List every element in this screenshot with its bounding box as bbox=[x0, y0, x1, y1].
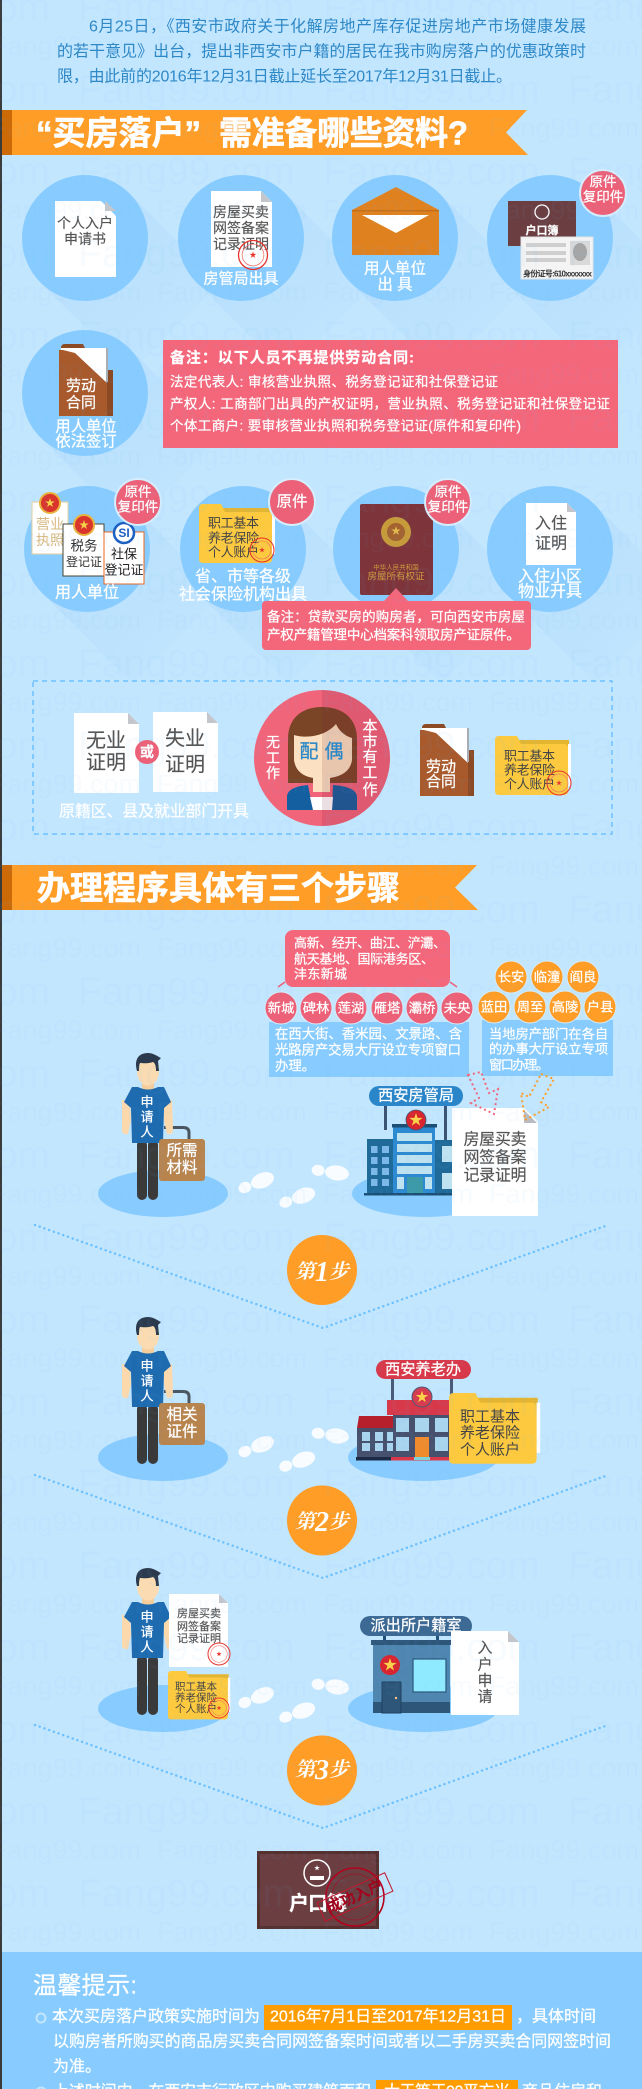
step 3: applicant with documents: 房屋买卖 bbox=[177, 1607, 221, 1620]
heading banner: three steps: 办理程序具体有三个步骤 bbox=[37, 870, 400, 906]
spouse portrait: 有 bbox=[362, 748, 378, 766]
issuer label: 原籍区、县及就业部门开具 bbox=[59, 802, 249, 820]
district bubbles: urban: 碑林 bbox=[303, 1000, 329, 1016]
material: pension account: 个人账户 bbox=[208, 544, 259, 560]
step 3: police station: 派出所户籍室 bbox=[370, 1618, 462, 1634]
material: business licences bbox=[24, 486, 150, 612]
labour contract folder: 合同 bbox=[426, 774, 456, 790]
spouse portrait: 偶 bbox=[324, 740, 344, 762]
material: pension account: 职工基本 bbox=[208, 516, 259, 530]
material: business licences: 执照 bbox=[36, 532, 64, 548]
jobless certificate: 证明 bbox=[165, 753, 205, 776]
step 3: applicant with documents: 网签备案 bbox=[177, 1619, 221, 1633]
step 1: housing bureau: 网签备案 bbox=[464, 1148, 526, 1166]
step 1 divider bbox=[35, 1225, 608, 1328]
jobless certificate bbox=[153, 712, 218, 792]
material: business licences: SI bbox=[118, 526, 130, 540]
step 3: applicant with documents: 个人账户 bbox=[175, 1702, 217, 1715]
step 2 divider bbox=[35, 1475, 608, 1578]
step 1: applicant with materials: 申 bbox=[140, 1094, 154, 1110]
step 1: housing bureau bbox=[352, 1086, 538, 1217]
tip 1: 本次买房落户政策实施时间为 bbox=[52, 2008, 260, 2026]
step 1: applicant with materials bbox=[98, 1053, 228, 1217]
step 3: applicant with documents: 养老保险 bbox=[175, 1691, 218, 1704]
labour contract folder: 劳动 bbox=[426, 758, 456, 776]
material: labour contract bbox=[22, 330, 148, 456]
material: contract filing record: 记录证明 bbox=[213, 236, 269, 252]
spouse portrait: 配 bbox=[299, 742, 319, 762]
material: business licences: 社保 bbox=[111, 546, 137, 562]
material: household register and ID: 身份证号:610xxxxxxx bbox=[523, 268, 593, 278]
step 2 badge: 第2步 bbox=[295, 1506, 351, 1538]
spouse portrait: 本 bbox=[362, 718, 378, 736]
step 2: applicant with certificates: 申 bbox=[140, 1358, 154, 1374]
tip 1: ，具体时间 bbox=[516, 2008, 596, 2026]
material: personal application bbox=[22, 175, 148, 301]
household register with stamp: 户口簿 bbox=[289, 1891, 347, 1915]
material: envelope: 出 具 bbox=[377, 276, 413, 294]
panel: tips bbox=[2, 1952, 642, 2089]
intro paragraph: 6月25日，《西安市政府关于化解房地产库存促进房地产市场健康发展 bbox=[89, 18, 586, 36]
or badge bbox=[135, 740, 159, 764]
step 1 badge bbox=[287, 1235, 357, 1305]
step 2: pension office: 养老保险 bbox=[460, 1424, 520, 1442]
material: contract filing record: 网签备案 bbox=[213, 220, 269, 236]
arrow: county route bbox=[521, 1074, 554, 1120]
heading banner: materials: 需准备哪些资料? bbox=[219, 114, 468, 152]
district bubbles: urban bbox=[265, 992, 473, 1024]
tip 1: 为准。 bbox=[53, 2058, 101, 2076]
step 2: applicant with certificates: 相关 bbox=[166, 1406, 198, 1424]
material: pension account: 社会保险机构出具 bbox=[179, 586, 307, 604]
blue box: urban window locations: 在西大街、香米园、文景路、含 bbox=[275, 1026, 462, 1042]
step 2: applicant with certificates: 证件 bbox=[166, 1422, 198, 1440]
step 3: applicant with documents: 职工基本 bbox=[175, 1680, 218, 1693]
unemployment certificate bbox=[74, 713, 139, 793]
footprints 1 bbox=[236, 1162, 350, 1211]
blue box: urban window locations bbox=[269, 1022, 469, 1077]
pension folder bbox=[495, 736, 571, 795]
blue box: county window locations: 当地房产部门在各自 bbox=[489, 1026, 608, 1042]
household register with stamp bbox=[257, 1851, 393, 1929]
jobless certificate: 失业 bbox=[165, 727, 205, 750]
material: labour contract: 合同 bbox=[66, 394, 96, 412]
material: property ownership certificate: 中华人民共和国 bbox=[373, 562, 419, 572]
step 1 badge: 第1步 bbox=[295, 1256, 351, 1288]
note: labour contract exemptions: 个体工商户: 要审核营业执照和税务登记证(原件和复印件) bbox=[170, 418, 521, 434]
step 3: police station: 户 bbox=[477, 1656, 493, 1674]
step 1: applicant with materials: 所需 bbox=[166, 1142, 198, 1160]
district bubbles: urban: 灞桥 bbox=[409, 1000, 435, 1016]
material: residence certificate: 入住 bbox=[535, 514, 567, 532]
step 3: police station: 入 bbox=[477, 1640, 493, 1656]
household register with stamp: 成功入户 bbox=[324, 1876, 386, 1917]
material: residence certificate: 证明 bbox=[535, 534, 567, 552]
heading banner: materials bbox=[2, 110, 528, 155]
blue box: county window locations bbox=[482, 1020, 613, 1076]
material: household register and ID: 户口簿 bbox=[526, 223, 558, 237]
step 2: applicant with certificates: 请 bbox=[140, 1374, 154, 1388]
spouse portrait: 作 bbox=[362, 782, 378, 798]
heading banner: materials: “买房落户” bbox=[36, 114, 201, 152]
note: labour contract exemptions: 产权人: 工商部门出具的产权证明，营业执照、税务登记证和社保登记证 bbox=[170, 396, 610, 412]
note: mortgage buyers: 产权产籍管理中心档案科领取房产证原件。 bbox=[267, 626, 520, 642]
badge: original bbox=[269, 479, 315, 525]
note: mortgage buyers: 备注：贷款买房的购房者，可向西安市房屋 bbox=[267, 608, 525, 624]
badge: original and copy bbox=[580, 170, 626, 216]
step 1: housing bureau: 记录证明 bbox=[464, 1166, 526, 1184]
pension folder: 个人账户 bbox=[504, 776, 555, 792]
spouse portrait: 工 bbox=[266, 750, 280, 766]
material: labour contract: 依法签订 bbox=[55, 434, 117, 450]
step 2: pension office: 职工基本 bbox=[460, 1408, 520, 1426]
step 3: police station bbox=[348, 1616, 519, 1732]
district bubbles: counties: 长安 bbox=[498, 970, 524, 984]
district bubbles: urban: 未央 bbox=[444, 1000, 470, 1016]
step 1: applicant with materials: 人 bbox=[140, 1124, 154, 1140]
material: envelope bbox=[332, 175, 458, 301]
tip 1 bbox=[36, 2005, 611, 2076]
step 2 badge bbox=[287, 1486, 357, 1556]
badge: original and copy bbox=[425, 479, 471, 525]
step 3: police station: 申 bbox=[477, 1672, 493, 1690]
blue box: county window locations: 的办事大厅设立专项 bbox=[489, 1042, 608, 1056]
callout: main urban districts: 沣东新城 bbox=[294, 966, 347, 982]
material: business licences: 登记证 bbox=[104, 562, 144, 578]
material: personal application: 个人入户 bbox=[57, 215, 113, 231]
unemployment certificate: 无业 bbox=[86, 729, 126, 752]
badge: original and copy: 原件 bbox=[590, 174, 616, 190]
step 1: housing bureau: 西安房管局 bbox=[378, 1088, 454, 1104]
intro paragraph: 的若干意见》出台，提出非西安市户籍的居民在我市购房落户的优惠政策时 bbox=[57, 42, 586, 60]
tip 2 bbox=[36, 2080, 602, 2089]
tips heading: 温馨提示: bbox=[33, 1972, 137, 2000]
pension folder: 养老保险 bbox=[504, 762, 555, 778]
district bubbles: counties: 户县 bbox=[587, 998, 613, 1014]
material: residence certificate: 物业开具 bbox=[518, 582, 582, 600]
material: business licences: 登记证 bbox=[66, 554, 102, 569]
badge: original and copy: 原件 bbox=[124, 484, 152, 500]
blue box: urban window locations: 办理。 bbox=[275, 1058, 315, 1074]
footprints 2 bbox=[236, 1425, 350, 1475]
spouse portrait: 市 bbox=[362, 734, 378, 750]
note: mortgage buyers bbox=[262, 588, 531, 650]
badge: original and copy bbox=[115, 479, 161, 525]
step 3: applicant with documents: 人 bbox=[140, 1640, 154, 1654]
step 2: applicant with certificates: 人 bbox=[140, 1388, 154, 1404]
district bubbles: counties bbox=[478, 961, 616, 1023]
step 3: applicant with documents: 请 bbox=[140, 1624, 154, 1640]
step 2: applicant with certificates bbox=[98, 1317, 228, 1481]
district bubbles: urban: 新城 bbox=[268, 1000, 294, 1016]
material: residence certificate: 入住小区 bbox=[518, 568, 582, 586]
callout: main urban districts: 航天基地、国际港务区、 bbox=[294, 952, 434, 966]
blue box: urban window locations: 光路房产交易大厅设立专项窗口 bbox=[275, 1042, 461, 1058]
labour contract folder bbox=[420, 724, 474, 796]
step 3 badge: 第3步 bbox=[295, 1754, 351, 1786]
step 3: applicant with documents: 记录证明 bbox=[177, 1632, 221, 1645]
tip 1: 2016年7月1日至2017年12月31日 bbox=[270, 2008, 506, 2026]
panel: spouse documents bbox=[33, 681, 612, 834]
district bubbles: counties: 临潼 bbox=[534, 968, 560, 984]
badge: original: 原件 bbox=[276, 492, 308, 510]
step 1: applicant with materials: 材料 bbox=[166, 1158, 198, 1176]
step 2: pension office: 西安养老办 bbox=[385, 1362, 461, 1378]
material: contract filing record: 房屋买卖 bbox=[213, 204, 269, 220]
material: household register and ID bbox=[487, 175, 613, 301]
step 3 badge bbox=[287, 1736, 357, 1806]
material: envelope: 用人单位 bbox=[364, 260, 426, 278]
material: contract filing record: 房管局出具 bbox=[203, 270, 279, 288]
badge: original and copy: 复印件 bbox=[428, 498, 468, 514]
material: personal application: 申请书 bbox=[64, 231, 106, 247]
material: pension account: 养老保险 bbox=[208, 530, 259, 546]
note: labour contract exemptions: 法定代表人: 审核营业执照、税务登记证和社保登记证 bbox=[170, 374, 498, 390]
district bubbles: urban: 莲湖 bbox=[338, 1000, 364, 1016]
step 3 divider bbox=[35, 1725, 608, 1828]
material: contract filing record bbox=[178, 175, 304, 301]
material: labour contract: 用人单位 bbox=[55, 418, 117, 436]
district bubbles: urban: 雁塔 bbox=[374, 1000, 400, 1016]
intro paragraph: 限，由此前的2016年12月31日截止延长至2017年12月31日截止。 bbox=[57, 68, 512, 86]
district bubbles: counties: 周至 bbox=[517, 1000, 543, 1014]
material: pension account bbox=[179, 486, 307, 612]
unemployment certificate: 证明 bbox=[86, 751, 126, 774]
callout: main urban districts: 高新、经开、曲江、浐灞、 bbox=[294, 936, 446, 950]
tip 1: 以购房者所购买的商品房买卖合同网签备案时间或者以二手房买卖合同网签时间 bbox=[53, 2032, 611, 2050]
arrow: urban route bbox=[468, 1072, 498, 1114]
badge: original and copy: 复印件 bbox=[118, 498, 158, 514]
or badge: 或 bbox=[140, 744, 154, 760]
footprints 3 bbox=[236, 1676, 350, 1726]
material: pension account: 省、市等各级 bbox=[195, 568, 291, 586]
step 3: police station: 请 bbox=[477, 1688, 493, 1706]
pension folder: 职工基本 bbox=[504, 748, 555, 764]
material: property ownership certificate bbox=[333, 486, 459, 612]
spouse portrait: 作 bbox=[266, 765, 280, 781]
note: labour contract exemptions: 备注：以下人员不再提供劳动合同: bbox=[170, 348, 414, 366]
spouse portrait: 无 bbox=[266, 734, 280, 750]
district bubbles: counties: 蓝田 bbox=[481, 1000, 507, 1014]
spouse portrait: 工 bbox=[362, 764, 378, 782]
heading banner: three steps bbox=[2, 865, 478, 910]
callout: main urban districts bbox=[278, 930, 457, 987]
district bubbles: counties: 高陵 bbox=[552, 998, 578, 1014]
material: labour contract: 劳动 bbox=[66, 378, 96, 394]
intro paragraph bbox=[57, 18, 586, 86]
step 1: housing bureau: 房屋买卖 bbox=[464, 1130, 526, 1148]
step 3: applicant with documents: 申 bbox=[140, 1610, 154, 1624]
badge: original and copy: 复印件 bbox=[583, 188, 623, 204]
blue box: county window locations: 窗口办理。 bbox=[489, 1056, 549, 1072]
material: business licences: 税务 bbox=[70, 538, 98, 554]
step 1: applicant with materials: 请 bbox=[140, 1110, 154, 1124]
material: property ownership certificate: 房屋所有权证 bbox=[367, 570, 425, 582]
step 2: pension office bbox=[348, 1360, 540, 1481]
step 3: applicant with documents bbox=[98, 1568, 230, 1732]
material: business licences: 营业 bbox=[36, 516, 64, 532]
district bubbles: counties: 阎良 bbox=[570, 970, 596, 984]
badge: original and copy: 原件 bbox=[434, 484, 462, 500]
note: labour contract exemptions bbox=[163, 340, 618, 448]
material: residence certificate bbox=[487, 486, 613, 612]
spouse portrait bbox=[254, 690, 390, 826]
material: business licences: 用人单位 bbox=[55, 584, 119, 602]
step 2: pension office: 个人账户 bbox=[460, 1442, 520, 1458]
